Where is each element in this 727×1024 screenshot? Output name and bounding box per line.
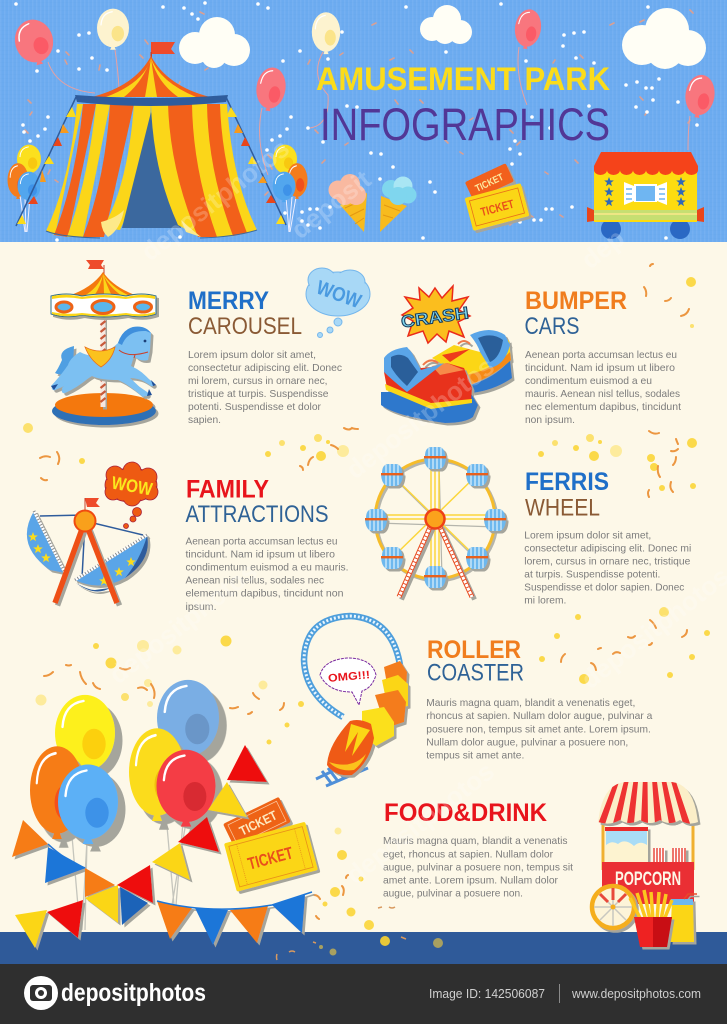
orange balloon bbox=[30, 746, 84, 839]
ride flag bbox=[85, 498, 100, 512]
tent roof bbox=[92, 56, 210, 97]
golden balloon bbox=[129, 728, 185, 821]
ice cream blue bbox=[380, 176, 416, 232]
cabins bbox=[365, 447, 506, 588]
popcorn label: POPCORN bbox=[615, 869, 681, 890]
tent valance bbox=[75, 95, 228, 106]
body text bbox=[186, 536, 348, 613]
body text: amet ante. Lorem ipsum. Nullam dolor bbox=[383, 875, 558, 887]
confetti streamers bbox=[40, 264, 689, 919]
blue balloon bbox=[58, 764, 118, 844]
a-frame bbox=[55, 521, 117, 603]
body text: Suspendisse et dolor sapien. Donec bbox=[524, 582, 684, 594]
watermarks: deposit bbox=[285, 164, 377, 245]
family ride bbox=[27, 462, 158, 603]
body text: rhoncus at sapien. Nullam dolor augue, pulvinar a bbox=[426, 710, 652, 722]
body text: mauris. Aenean nisl tellus, sodales bbox=[525, 388, 680, 400]
body text: condimentum euismod a eu mauris. bbox=[186, 562, 348, 574]
track base bbox=[316, 759, 368, 786]
title: infographics: INFOGRAPHICS bbox=[320, 99, 610, 150]
ice cream pink bbox=[328, 174, 367, 232]
french fries bbox=[630, 890, 672, 947]
roller coaster bbox=[304, 616, 408, 786]
bottom tickets bbox=[223, 797, 318, 892]
watermarks: depositphotos bbox=[340, 351, 500, 485]
body text: nec elementum dapibus, tincidunt bbox=[525, 401, 681, 413]
coaster track loop bbox=[304, 616, 400, 717]
watermarks: depositphotos bbox=[340, 756, 500, 890]
body text: potenti. Suspendisse et dolor bbox=[188, 401, 321, 413]
body text: tincidunt. Nam id ipsum ut libero bbox=[186, 548, 335, 560]
body text: Lorem ipsum dolor sit amet, bbox=[524, 529, 651, 541]
footer bar bbox=[0, 964, 727, 1024]
orange ticket: TICKET bbox=[237, 807, 279, 839]
bumper cars bbox=[381, 286, 512, 423]
wow burst: WOW bbox=[110, 473, 154, 499]
divider bbox=[559, 984, 560, 1003]
body text: posuere non, tempus sit amet ante. Lorem ipsum. bbox=[426, 723, 651, 735]
yellow balloon bbox=[55, 695, 115, 776]
circus tent bbox=[16, 42, 286, 238]
crash burst: CRASH bbox=[400, 303, 470, 332]
orange ticket: TICKET bbox=[474, 172, 506, 195]
subheading: ATTRACTIONS bbox=[186, 501, 328, 528]
balloon cluster right bbox=[272, 145, 308, 232]
body text: Aenean porta accumsan lectus eu bbox=[525, 349, 677, 361]
body text bbox=[426, 697, 652, 761]
heading: BUMPER bbox=[525, 287, 627, 315]
wagon stars bbox=[604, 177, 686, 206]
section: roller coaster bbox=[426, 636, 652, 761]
heading: FOOD&DRINK bbox=[384, 799, 547, 827]
popcorn boxes bbox=[653, 848, 686, 862]
body text: Mauris magna quam, blandit a venenatis eget, bbox=[426, 697, 635, 709]
bottom balloons bbox=[30, 680, 219, 930]
header tickets bbox=[465, 163, 529, 231]
body text: non ipsum. bbox=[525, 414, 575, 426]
wow thought cloud blue: WOW bbox=[313, 277, 364, 313]
body text: Nullam dolor augue, pulvinar a posuere non, bbox=[426, 736, 628, 748]
body text: Aenean nisl tellus, sodales nec bbox=[186, 574, 324, 586]
body text: Aenean porta accumsan lectus eu bbox=[186, 536, 338, 548]
yellow ticket: TICKET bbox=[246, 843, 296, 874]
cart wheel bbox=[592, 886, 634, 928]
carousel flag bbox=[86, 260, 104, 275]
body text: tempus sit amet ante. bbox=[426, 749, 524, 761]
heading: MERRY bbox=[188, 287, 269, 315]
subheading: WHEEL bbox=[525, 494, 600, 522]
body text: lorem, cursus in ornare nec, tristique bbox=[524, 556, 690, 568]
body text bbox=[525, 349, 681, 426]
body text: mi lorem. bbox=[524, 595, 566, 607]
heading: ROLLER bbox=[427, 636, 521, 664]
cloud right bbox=[622, 8, 706, 69]
hub bbox=[426, 510, 444, 528]
carousel bbox=[51, 260, 156, 425]
body text: Mauris magna quam, blandit a venenatis bbox=[383, 835, 568, 847]
balloon strings bbox=[72, 815, 186, 930]
support legs bbox=[399, 525, 472, 597]
tent body stripes bbox=[46, 104, 257, 238]
body text bbox=[524, 529, 691, 607]
popcorn machine bbox=[605, 827, 648, 863]
body text: mi lorem, cursus in ornare nec, bbox=[188, 375, 328, 387]
omg speech bubble: OMG!!! bbox=[328, 669, 371, 685]
hub bbox=[74, 510, 96, 532]
wow thought cloud blue bbox=[306, 268, 370, 338]
body text: augue, pulvinar a posuere non, tempus sit bbox=[383, 861, 573, 873]
body text: tristique at turpis. Suspendisse bbox=[188, 388, 329, 400]
body text: tincidunt. Nam id ipsum ut libero bbox=[525, 362, 675, 374]
confetti dots bbox=[23, 277, 710, 930]
bottom navy band bbox=[0, 932, 727, 964]
header balloons bbox=[10, 8, 717, 175]
balloon cluster left bbox=[8, 145, 41, 232]
spokes bbox=[378, 462, 497, 578]
section: food and drink bbox=[383, 799, 573, 900]
back car bbox=[432, 330, 512, 393]
watermarks bbox=[103, 133, 727, 890]
image id: Image ID: 142506087 bbox=[429, 987, 545, 1001]
body text: sapien. bbox=[188, 414, 221, 426]
body text: ipsum. bbox=[186, 601, 216, 613]
wheel ring bbox=[375, 459, 497, 581]
wagon body bbox=[594, 168, 697, 222]
subheading: COASTER bbox=[427, 660, 524, 687]
circus wagon bbox=[587, 152, 704, 239]
body text: condimentum euismod a eu bbox=[525, 375, 652, 387]
left boat bbox=[27, 511, 65, 573]
cloud centre bbox=[420, 5, 472, 44]
section: family attractions bbox=[186, 476, 348, 613]
cart posts bbox=[603, 812, 693, 870]
ferris wheel bbox=[365, 447, 506, 597]
section: ferris wheel bbox=[524, 468, 691, 607]
bunting flags bbox=[12, 745, 312, 948]
drink cup bbox=[670, 894, 697, 942]
red balloon bbox=[156, 750, 216, 827]
body text bbox=[188, 349, 342, 426]
cart body bbox=[602, 862, 694, 904]
coaster cars bbox=[327, 661, 408, 775]
yellow ticket: TICKET bbox=[479, 197, 516, 219]
wagon wheels bbox=[601, 219, 690, 239]
carousel pole bbox=[100, 315, 106, 407]
watermarks: depositphotos bbox=[103, 556, 263, 690]
section: merry carousel bbox=[188, 287, 342, 426]
website: www.depositphotos.com bbox=[571, 987, 701, 1001]
wagon window bbox=[624, 182, 667, 205]
watermarks: depositphotos bbox=[135, 133, 295, 267]
section: bumper cars bbox=[524, 287, 681, 426]
navy band confetti bbox=[276, 907, 443, 960]
arms bbox=[40, 515, 143, 578]
header banner bbox=[0, 0, 727, 242]
body text: elementum dapibus, tincidunt non bbox=[186, 588, 344, 600]
striped awning bbox=[596, 780, 700, 828]
carousel canopy bbox=[51, 294, 156, 317]
body text: consectetur adipiscing elit. Donec mi bbox=[524, 543, 691, 555]
carousel platform bbox=[52, 393, 156, 425]
body text: Lorem ipsum dolor sit amet, bbox=[188, 349, 316, 361]
right boat bbox=[75, 535, 148, 592]
subheading: CAROUSEL bbox=[188, 313, 302, 340]
watermarks: dep bbox=[575, 223, 630, 275]
body text bbox=[383, 835, 573, 900]
carousel horse bbox=[51, 327, 156, 397]
body text: eget, rhoncus at sapien. Nullam dolor bbox=[383, 848, 553, 860]
heading: FERRIS bbox=[525, 468, 609, 496]
heading: FAMILY bbox=[186, 476, 269, 504]
wow burst bbox=[105, 462, 158, 528]
tent flag bbox=[150, 42, 175, 58]
popcorn cart bbox=[592, 780, 700, 947]
tent ropes and pennants bbox=[16, 97, 286, 226]
logo camera icon bbox=[24, 976, 58, 1010]
wagon bumpers bbox=[587, 207, 704, 222]
omg speech bubble bbox=[320, 658, 376, 705]
body text: consectetur adipiscing elit. Donec bbox=[188, 362, 342, 374]
carousel roof bbox=[68, 272, 138, 296]
front car bbox=[381, 347, 478, 423]
wagon roof bbox=[594, 152, 698, 175]
steel blue balloon bbox=[157, 680, 219, 761]
body text: augue, pulvinar a posuere non. bbox=[383, 888, 523, 900]
cloud left bbox=[179, 17, 250, 68]
title: amusement park: AMUSEMENT PARK bbox=[316, 61, 610, 97]
subheading: CARS bbox=[524, 313, 580, 340]
body text: at turpis. Suspendisse potenti. bbox=[524, 569, 660, 581]
logo wordmark: depositphotos bbox=[61, 979, 206, 1007]
